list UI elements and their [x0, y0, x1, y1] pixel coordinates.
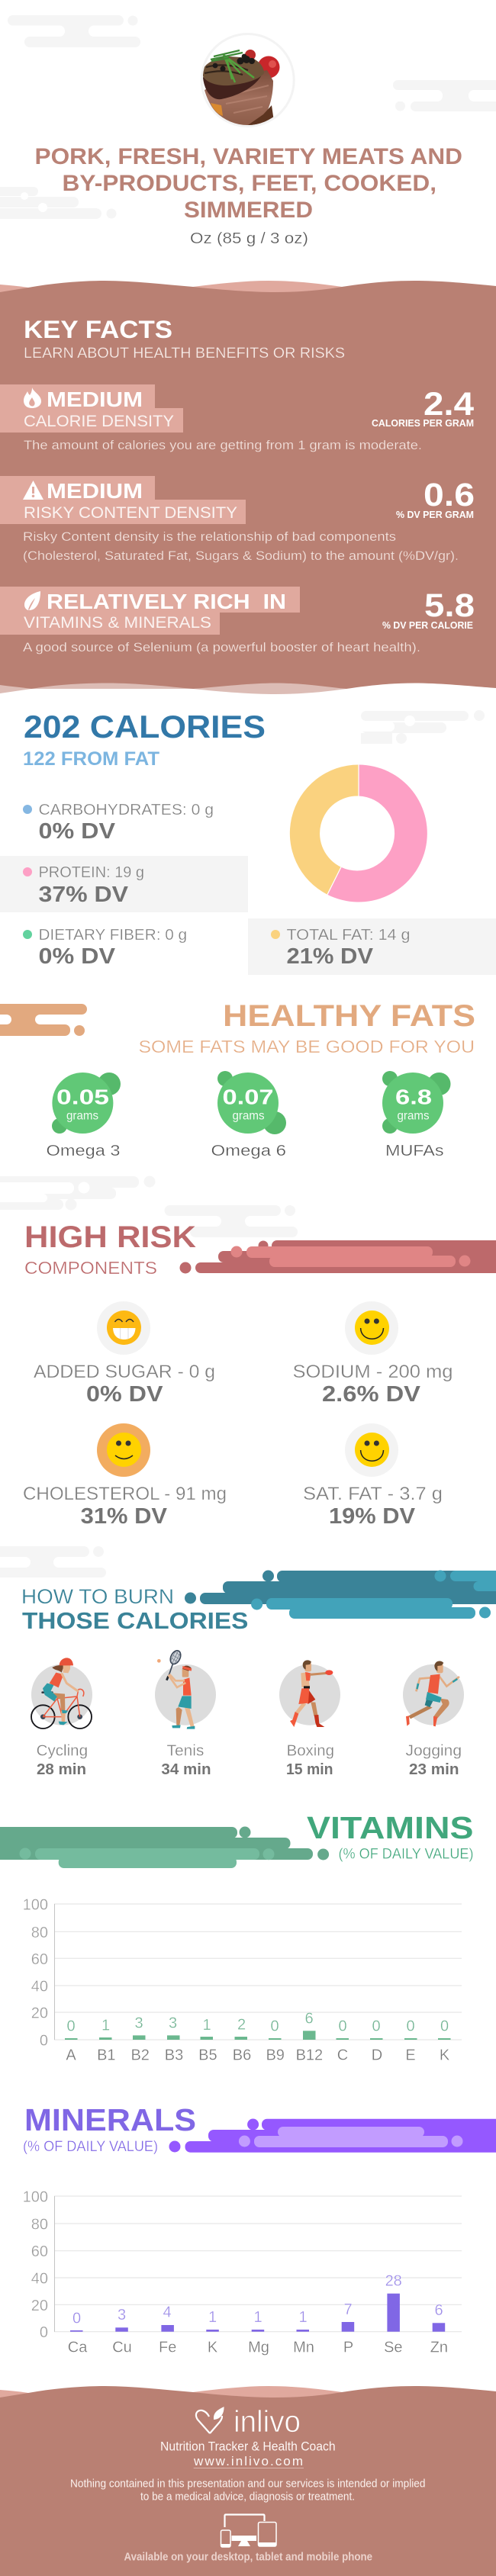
icon: flame — [24, 388, 41, 408]
fact: risky content density: MEDIUM — [47, 479, 143, 503]
bar chart: minerals: 7 — [343, 2301, 353, 2318]
fact: risky content density: RISKY CONTENT DENSITY — [24, 504, 237, 522]
decorative banner: burn — [185, 1570, 496, 1619]
bar chart: vitamins: 0 — [40, 2032, 48, 2049]
bar chart: minerals: 20 — [31, 2298, 48, 2314]
fact: vitamins and minerals: A good source of Selenium (a powerful booster of heart health). — [23, 640, 420, 654]
bar chart: minerals: Fe — [159, 2339, 176, 2356]
title — [35, 144, 462, 223]
activity: boxing: 15 min — [286, 1761, 333, 1778]
risk item: saturated fat: 19% DV — [329, 1504, 416, 1529]
bar chart: minerals: 1 — [253, 2309, 262, 2326]
risk item: added sugar: 0% DV — [86, 1382, 163, 1407]
bar chart: minerals: 1 — [298, 2309, 308, 2326]
fact: vitamins and minerals — [0, 587, 475, 654]
bar chart: minerals: 80 — [31, 2217, 48, 2233]
panel: vitamins — [0, 1810, 473, 2064]
legend: dietary fiber: 0% DV — [38, 944, 116, 969]
bar chart: vitamins: 80 — [31, 1925, 48, 1941]
icon: devices — [221, 2514, 276, 2547]
heading: high risk — [24, 1220, 196, 1278]
bar chart: minerals: Cu — [112, 2339, 132, 2356]
bar chart: minerals: 0 — [72, 2311, 81, 2327]
bar chart: minerals: Se — [384, 2339, 403, 2356]
panel: footer — [0, 2386, 496, 2576]
heading: 202 calories — [23, 709, 266, 770]
risk item: added sugar — [34, 1301, 215, 1407]
panel: how to burn calories — [0, 1546, 496, 1778]
activity: jogging: Jogging — [406, 1743, 462, 1760]
fact: calorie density: CALORIE DENSITY — [24, 413, 174, 430]
risk item: cholesterol — [23, 1423, 227, 1529]
website link: www.inlivo.com — [193, 2454, 303, 2468]
icon: warning — [23, 481, 43, 500]
logo: inlivo: inlivo — [234, 2405, 301, 2439]
risk item: sodium — [293, 1301, 453, 1407]
panel: calories — [0, 709, 496, 975]
activity: boxing: Boxing — [287, 1743, 334, 1760]
bar chart: minerals: 40 — [31, 2270, 48, 2287]
heading: high risk: COMPONENTS — [24, 1258, 157, 1278]
fact: calorie density: The amount of calories you are getting from 1 gram is moderate. — [24, 438, 422, 452]
risk item: cholesterol: CHOLESTEROL - 91 mg — [23, 1484, 227, 1504]
panel: minerals — [23, 2102, 496, 2356]
bar chart: minerals: 0 — [40, 2324, 48, 2341]
activity: cycling — [31, 1658, 92, 1778]
bar chart: vitamins: 0 — [406, 2018, 415, 2035]
badge: mufas: MUFAs — [385, 1143, 444, 1159]
bar chart: minerals: K — [208, 2339, 218, 2356]
bar chart: minerals: P — [343, 2339, 353, 2356]
bar chart: vitamins: 0 — [440, 2018, 449, 2035]
bar chart: vitamins: 3 — [169, 2015, 177, 2031]
fact: calorie density — [0, 384, 474, 452]
icon: leaf — [24, 591, 40, 610]
disclaimer — [70, 2478, 426, 2503]
decorative banner: minerals — [169, 2119, 496, 2153]
activity: tennis: Tenis — [166, 1743, 204, 1760]
bar chart: vitamins: 20 — [31, 2005, 48, 2021]
bar chart: minerals: 100 — [23, 2189, 48, 2206]
availability note: Available on your desktop, tablet and mobile phone — [124, 2551, 372, 2564]
fact: risky content density: 0.6 — [424, 477, 475, 513]
badge: omega 6 — [211, 1071, 286, 1159]
risk item: saturated fat — [303, 1423, 443, 1529]
fact: risky content density — [0, 476, 475, 563]
heading: how to burn — [21, 1585, 248, 1634]
bar chart: vitamins: B5 — [198, 2047, 217, 2064]
bar chart: vitamins: C — [337, 2047, 348, 2064]
bar chart: vitamins: 6 — [304, 2011, 314, 2028]
badge: mufas — [382, 1071, 450, 1159]
bar chart: vitamins: B9 — [266, 2047, 285, 2064]
legend: dietary fiber: DIETARY FIBER: 0 g — [38, 927, 187, 944]
legend: carbohydrates — [23, 802, 214, 844]
bar chart: minerals: 6 — [434, 2302, 443, 2319]
heading: healthy fats: HEALTHY FATS — [223, 999, 475, 1033]
bar chart: vitamins: 0 — [338, 2018, 347, 2035]
fact: vitamins and minerals: RELATIVELY RICH IN — [47, 590, 286, 613]
bar chart: vitamins: 0 — [372, 2018, 381, 2035]
bar chart: vitamins: 1 — [101, 2018, 110, 2034]
risk item: sodium: 2.6% DV — [322, 1382, 421, 1407]
activity: tennis: 34 min — [161, 1761, 211, 1778]
activity: jogging: 23 min — [409, 1761, 459, 1778]
heading: high risk: HIGH RISK — [24, 1220, 196, 1254]
legend: total fat: 21% DV — [287, 944, 374, 969]
heading: how to burn: THOSE CALORIES — [22, 1607, 248, 1634]
activity: boxing — [279, 1660, 340, 1778]
heading: vitamins: (% OF DAILY VALUE) — [339, 1847, 473, 1863]
title: PORK, FRESH, VARIETY MEATS AND — [35, 144, 462, 169]
bar chart: vitamins — [23, 1896, 462, 2064]
bar chart: minerals: Ca — [68, 2339, 88, 2356]
badge: omega 3 — [46, 1073, 121, 1159]
fact: vitamins and minerals: 5.8 — [424, 587, 475, 624]
bar chart: minerals: 4 — [163, 2304, 172, 2320]
bar chart: vitamins: A — [66, 2047, 76, 2064]
donut chart — [290, 764, 427, 902]
badge: omega 3: grams — [66, 1109, 98, 1123]
decorative banner: vitamins — [0, 1826, 329, 1868]
bar chart: vitamins: 0 — [270, 2018, 279, 2035]
heading: healthy fats — [139, 999, 475, 1056]
logo: inlivo — [196, 2405, 301, 2439]
fact: calorie density: CALORIES PER GRAM — [372, 417, 474, 429]
fact: calorie density: MEDIUM — [47, 388, 143, 411]
bar chart: vitamins: B1 — [97, 2047, 116, 2064]
fact: risky content density: % DV PER GRAM — [396, 509, 474, 520]
bar chart: vitamins: 100 — [23, 1896, 48, 1913]
fact: vitamins and minerals: % DV PER CALORIE — [382, 619, 473, 631]
food photo — [201, 34, 294, 127]
bar chart: minerals: 3 — [118, 2307, 126, 2324]
bar chart: vitamins: 60 — [31, 1951, 48, 1968]
legend: dietary fiber — [23, 927, 187, 969]
heading: minerals: (% OF DAILY VALUE) — [23, 2139, 158, 2155]
title: BY-PRODUCTS, FEET, COOKED, — [63, 171, 436, 196]
bar chart: vitamins: 2 — [237, 2017, 246, 2034]
serving size: Oz (85 g / 3 oz) — [190, 230, 308, 247]
heading: 202 calories: 202 CALORIES — [24, 709, 266, 744]
panel: high risk components — [0, 1176, 496, 1529]
legend: total fat — [248, 918, 496, 975]
panel: healthy fats — [0, 999, 475, 1159]
heading: minerals: MINERALS — [24, 2102, 196, 2137]
activity: cycling: 28 min — [37, 1761, 86, 1778]
bar chart: vitamins: 0 — [66, 2018, 76, 2035]
badge: omega 6: 0.07 — [223, 1085, 273, 1109]
heading: healthy fats: SOME FATS MAY BE GOOD FOR YOU — [139, 1037, 475, 1056]
badge: omega 6: Omega 6 — [211, 1143, 286, 1159]
heading: key facts: LEARN ABOUT HEALTH BENEFITS OR RISKS — [24, 346, 345, 362]
legend: total fat: TOTAL FAT: 14 g — [287, 927, 411, 944]
fact: risky content density: (Cholesterol, Saturated Fat, Sugars & Sodium) to the amount (%DV/gr). — [23, 548, 459, 563]
risk item: added sugar: ADDED SUGAR - 0 g — [34, 1362, 215, 1382]
bar chart: vitamins: D — [372, 2047, 382, 2064]
risk item: saturated fat: SAT. FAT - 3.7 g — [303, 1484, 443, 1504]
risk item: sodium: SODIUM - 200 mg — [293, 1362, 453, 1382]
disclaimer: to be a medical advice, diagnosis or treatment. — [140, 2490, 355, 2503]
fact: calorie density: 2.4 — [424, 386, 474, 423]
heading: key facts: KEY FACTS — [24, 316, 172, 343]
badge: omega 6: grams — [232, 1109, 264, 1123]
bar chart: minerals: 28 — [385, 2273, 402, 2290]
bar chart: vitamins: K — [440, 2047, 450, 2064]
badge: omega 3: Omega 3 — [46, 1143, 121, 1159]
bar chart: vitamins: B6 — [233, 2047, 251, 2064]
bar chart: minerals: 60 — [31, 2243, 48, 2260]
tagline: Nutrition Tracker & Health Coach — [160, 2439, 336, 2454]
bar chart: minerals: Mg — [248, 2339, 269, 2356]
bar chart: vitamins: B12 — [296, 2047, 323, 2064]
heading: vitamins — [307, 1810, 473, 1863]
badge: omega 3: 0.05 — [56, 1085, 109, 1109]
disclaimer: Nothing contained in this presentation and our services is intended or implied — [70, 2478, 426, 2491]
bar chart: minerals: Mn — [293, 2339, 314, 2356]
activity: tennis — [155, 1649, 216, 1778]
title: SIMMERED — [184, 198, 313, 223]
legend: protein: 37% DV — [38, 883, 129, 907]
legend: carbohydrates: 0% DV — [38, 819, 116, 844]
bar chart: vitamins: 40 — [31, 1979, 48, 1996]
bar chart: minerals — [23, 2189, 462, 2356]
bar chart: vitamins: E — [405, 2047, 416, 2064]
panel: key facts — [0, 281, 496, 694]
legend: protein: PROTEIN: 19 g — [38, 864, 144, 881]
bar chart: vitamins: 3 — [134, 2015, 143, 2031]
heading: vitamins: VITAMINS — [307, 1810, 473, 1845]
fact: risky content density: Risky Content density is the relationship of bad components — [23, 529, 396, 544]
badge: mufas: 6.8 — [395, 1085, 432, 1109]
legend: carbohydrates: CARBOHYDRATES: 0 g — [38, 802, 214, 818]
heading: minerals — [23, 2102, 196, 2155]
heading: 202 calories: 122 FROM FAT — [23, 748, 159, 770]
bar chart: minerals: 1 — [208, 2309, 217, 2326]
fact: vitamins and minerals: VITAMINS & MINERALS — [24, 614, 211, 632]
header panel — [0, 15, 496, 247]
heading: key facts — [24, 316, 345, 362]
bar chart: minerals: Zn — [430, 2339, 448, 2356]
bar chart: vitamins: B2 — [130, 2047, 150, 2064]
legend: protein — [0, 856, 248, 912]
bar chart: vitamins: 1 — [202, 2017, 211, 2034]
activity: jogging — [403, 1661, 464, 1778]
activity: cycling: Cycling — [37, 1743, 88, 1760]
badge: mufas: grams — [397, 1109, 429, 1123]
risk item: cholesterol: 31% DV — [81, 1504, 168, 1529]
heading: how to burn: HOW TO BURN — [21, 1585, 174, 1608]
bar chart: vitamins: B3 — [165, 2047, 183, 2064]
decorative banner: high risk — [180, 1240, 496, 1274]
